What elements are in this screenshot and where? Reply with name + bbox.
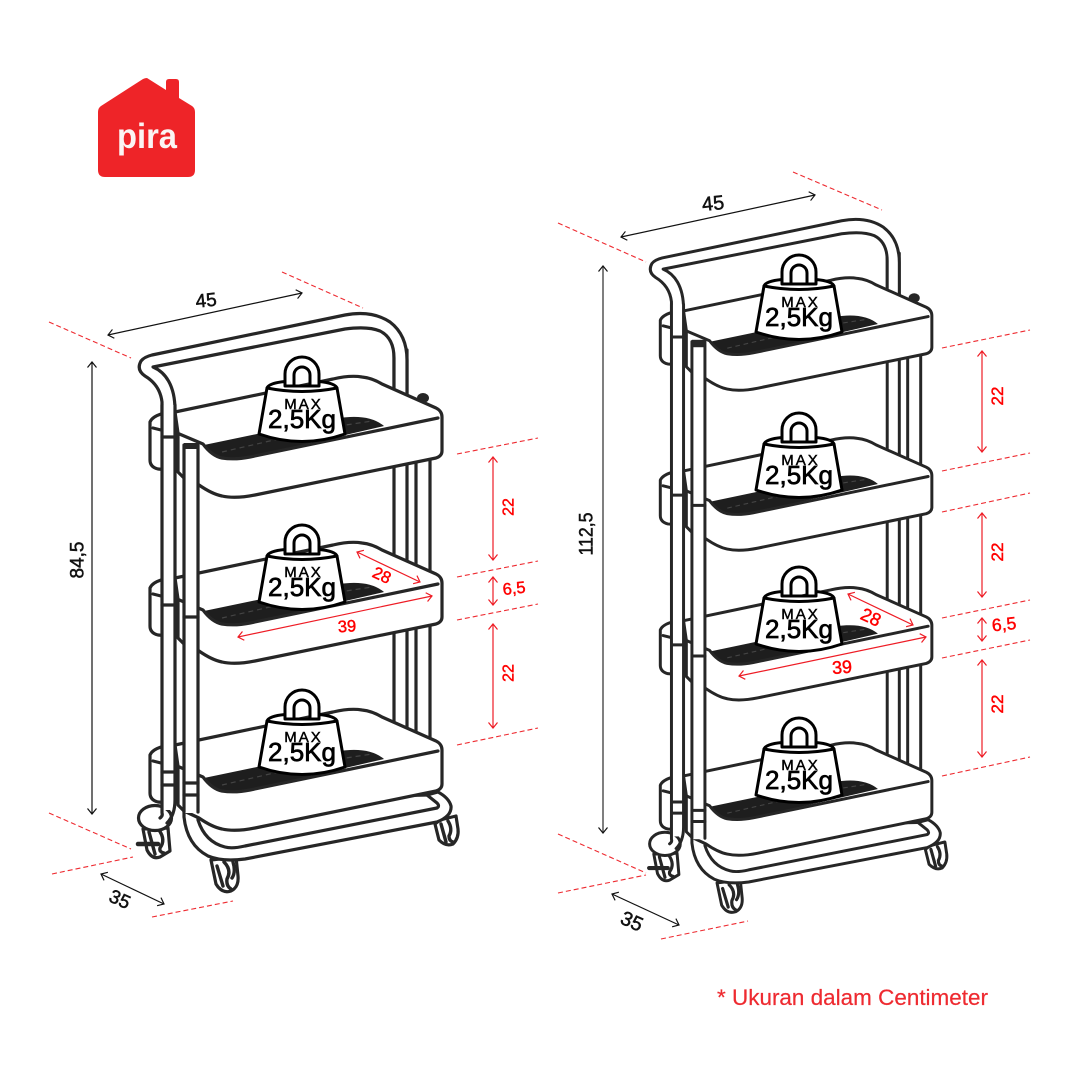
right trolley dimensions [558, 172, 1030, 939]
weight badge: right second: 2,5Kg [765, 460, 833, 490]
weight badge: right third [756, 567, 842, 652]
label: 39: 39 [337, 617, 357, 636]
arrow: width 45 [108, 293, 302, 335]
weight badge: right second [756, 413, 842, 498]
weight badge: left middle [259, 525, 345, 610]
label: 35: 35 [617, 907, 646, 936]
arrow: rim 6,5 [981, 618, 983, 641]
label: 45: 45 [195, 290, 218, 313]
logo: pira house: pira [117, 117, 177, 156]
label: 22 lower: 22 [501, 664, 518, 682]
label: 84,5: 84,5 [68, 542, 89, 578]
weight badge: left bottom [259, 690, 345, 774]
weight badge: left top: 2,5Kg [268, 404, 336, 434]
label: 45: 45 [701, 192, 725, 216]
weight badge: right first: MAX [781, 294, 820, 311]
label: 112,5: 112,5 [577, 512, 598, 556]
arrow: inner width 39 [238, 596, 432, 637]
weight badge: left top [259, 357, 345, 442]
arrow: width 45 [621, 195, 815, 237]
arrow: gap 22 upper [492, 457, 494, 560]
arrow: gap 22 lower [492, 624, 494, 728]
arrow: gap 22 first [981, 351, 983, 452]
left trolley drawing [138, 314, 458, 892]
arrow: height 112,5 [602, 266, 604, 833]
arrow: inner depth 28 [357, 552, 420, 582]
arrow: rim 6,5 [492, 577, 494, 605]
label: 35: 35 [106, 886, 133, 914]
arrow: inner width 39 [739, 637, 926, 676]
weight badge: right fourth: 2,5Kg [765, 765, 833, 795]
label: 22 first: 22 [988, 387, 1007, 405]
weight badge: right fourth: MAX [781, 757, 820, 774]
label: 28: 28 [858, 604, 884, 631]
label: 22 upper: 22 [501, 498, 518, 516]
label: 28: 28 [370, 564, 394, 588]
label: 22 third: 22 [988, 695, 1007, 713]
left trolley dimensions [49, 272, 538, 917]
right trolley drawing [649, 219, 947, 912]
weight badge: right third: MAX [781, 606, 820, 623]
weight badge: right third: 2,5Kg [765, 614, 833, 644]
weight badge: right first [756, 255, 842, 340]
weight badge: left bottom: MAX [284, 729, 323, 746]
label: 6,5: 6,5 [502, 579, 526, 599]
arrow: depth 35 [612, 894, 679, 925]
weight badge: right first: 2,5Kg [765, 302, 833, 332]
weight badge: right second: MAX [781, 452, 820, 469]
arrow: inner depth 28 [848, 594, 913, 625]
weight badge: left middle: 2,5Kg [268, 572, 336, 602]
arrow: gap 22 second [981, 513, 983, 597]
weight badge: left top: MAX [284, 396, 323, 413]
label: 22 second: 22 [988, 543, 1007, 561]
footnote: * Ukuran dalam Centimeter [717, 985, 988, 1010]
arrow: depth 35 [101, 874, 164, 904]
arrow: gap 22 third [981, 660, 983, 757]
weight badge: right fourth [756, 718, 842, 802]
weight badge: left bottom: 2,5Kg [268, 737, 336, 767]
label: 6,5: 6,5 [991, 613, 1017, 635]
label: 39: 39 [831, 657, 853, 678]
arrow: height 84,5 [91, 362, 93, 814]
weight badge: left middle: MAX [284, 564, 323, 581]
logo: pira house [98, 78, 195, 177]
